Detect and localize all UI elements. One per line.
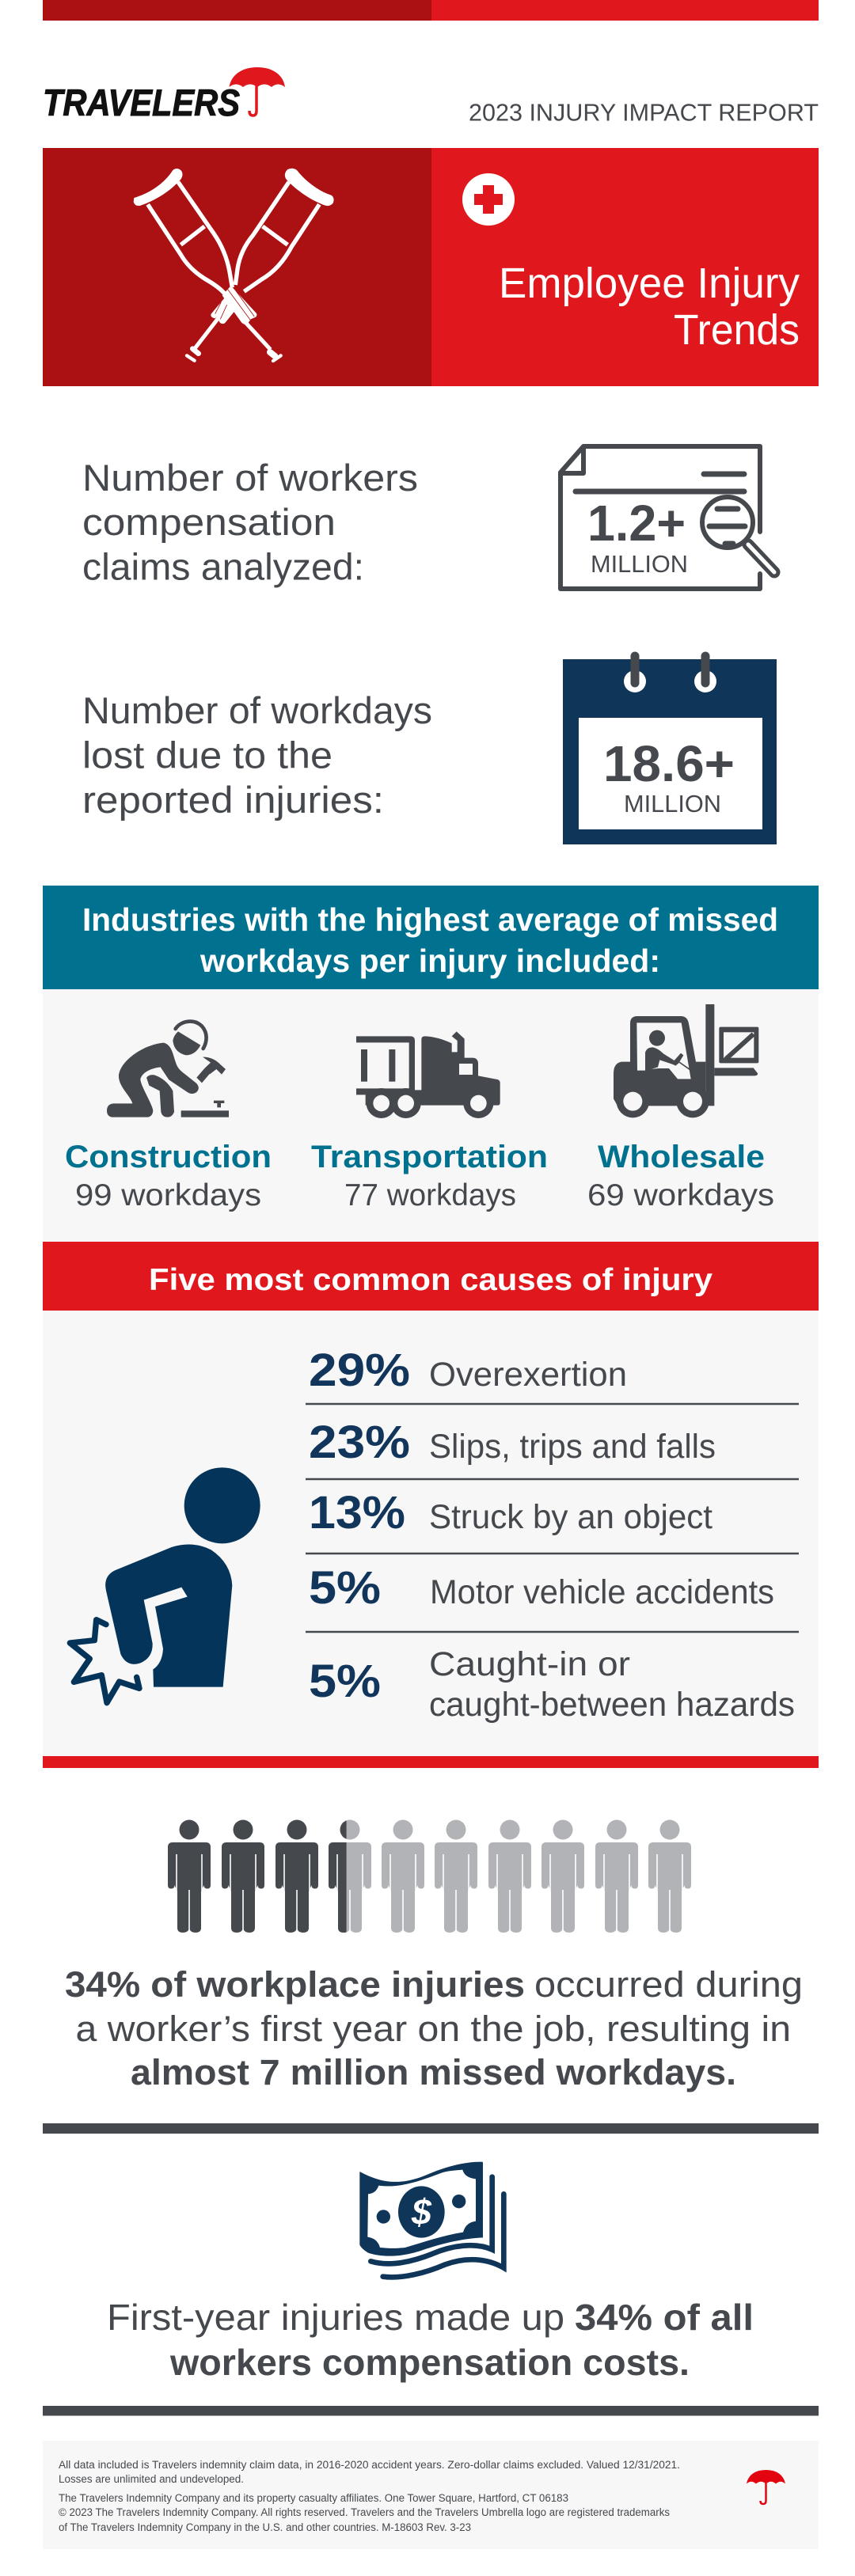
heading: Trends <box>674 306 800 354</box>
text: wholesale <box>587 1140 774 1212</box>
icon: forklift <box>614 1004 758 1117</box>
heading <box>499 260 800 354</box>
text: transportation <box>311 1140 548 1212</box>
text: wholesale: 69 workdays <box>587 1178 774 1212</box>
text: claims analyzed: Number of workers <box>82 457 418 499</box>
icon: money: $ <box>411 2192 432 2233</box>
panel: footer <box>43 2441 819 2549</box>
text: transportation: Transportation <box>311 1140 548 1174</box>
text: first-year costs <box>107 2297 754 2383</box>
icon: medical cross <box>462 173 515 226</box>
text: legal notes: Losses are unlimited and undeveloped. <box>59 2473 244 2485</box>
icon: calendar: MILLION <box>624 790 721 818</box>
icon: truck <box>356 1031 500 1118</box>
text: workdays lost: reported injuries: <box>82 779 384 821</box>
logo: Travelers: TRAVELERS <box>43 82 240 123</box>
row: struck: 13% <box>309 1487 405 1538</box>
icon: calendar <box>563 656 777 844</box>
heading: Industries with the highest average of missed <box>82 901 778 938</box>
logo: Travelers <box>43 67 285 123</box>
icon: claim document with magnifier: 1.2+ <box>587 495 686 552</box>
row: struck <box>309 1487 712 1538</box>
icon: row of ten people <box>168 1820 691 1933</box>
text: first-year costs: First-year injuries made up <box>107 2297 564 2338</box>
report title: 2023 INJURY IMPACT REPORT <box>469 98 819 127</box>
text: workdays lost <box>82 689 432 821</box>
row: motor vehicle <box>309 1562 774 1614</box>
text: workdays lost: Number of workdays <box>82 689 432 731</box>
heading <box>82 901 778 979</box>
text: first-year costs: workers compensation costs. <box>169 2342 690 2383</box>
text: legal notes <box>59 2459 680 2533</box>
text: first-year workplace injuries: almost 7 million missed workdays. <box>131 2052 736 2092</box>
heading: Five most common causes of injury <box>149 1263 712 1297</box>
text: legal notes: The Travelers Indemnity Company and its property casualty affiliates. One Tower Square, Hartford, CT 06183 <box>59 2492 568 2504</box>
row: caught: caught-between hazards <box>429 1686 795 1724</box>
text: legal notes: All data included is Travelers indemnity claim data, in 2016-2020 accident years. Zero-dollar claims excluded. Valued 12/31/2021. <box>59 2459 680 2471</box>
icon: umbrella <box>747 2470 785 2504</box>
heading: workdays per injury included: <box>200 943 660 979</box>
row: struck: Struck by an object <box>429 1498 712 1536</box>
heading: Employee Injury <box>499 260 800 307</box>
icon: claim document with magnifier: MILLION <box>591 550 688 578</box>
text: claims analyzed: compensation <box>82 501 336 543</box>
row: motor vehicle: 5% <box>309 1562 381 1614</box>
panel: causes of injury <box>43 1242 819 1768</box>
row: caught: Caught-in or <box>429 1645 630 1683</box>
icon: crutches <box>134 169 334 361</box>
row: caught <box>309 1645 795 1724</box>
row: slips: 23% <box>309 1417 410 1468</box>
icon: construction worker <box>107 1022 229 1117</box>
icon: claim document with magnifier <box>560 446 774 589</box>
icon: calendar: 18.6+ <box>603 735 735 792</box>
text: construction: 99 workdays <box>75 1178 261 1212</box>
row: slips: Slips, trips and falls <box>429 1428 716 1466</box>
text: claims analyzed: claims analyzed: <box>82 546 364 587</box>
text: legal notes: of The Travelers Indemnity Company in the U.S. and other countries. M-18603 Rev. 3-23 <box>59 2521 471 2533</box>
text: wholesale: Wholesale <box>598 1140 765 1174</box>
text: workdays lost: lost due to the <box>82 734 332 776</box>
top colour band <box>43 0 819 21</box>
icon: person with back pain <box>70 1467 260 1703</box>
text: construction: Construction <box>65 1140 272 1174</box>
row: overexertion: Overexertion <box>429 1356 627 1394</box>
row: overexertion: 29% <box>309 1345 410 1396</box>
text: first-year workplace injuries: occurred during <box>534 1964 803 2005</box>
row: slips <box>309 1417 716 1468</box>
text: first-year workplace injuries: 34% of workplace injuries <box>65 1964 525 2005</box>
row: caught: 5% <box>309 1656 381 1707</box>
text: first-year workplace injuries <box>65 1964 803 2092</box>
icon: money <box>359 2162 504 2277</box>
panel: industries <box>43 886 819 1242</box>
text: claims analyzed <box>82 457 418 587</box>
text: transportation: 77 workdays <box>344 1178 516 1212</box>
text: first-year costs: 34% of all <box>575 2297 754 2338</box>
text: construction <box>65 1140 272 1212</box>
text: first-year workplace injuries: a worker’s first year on the job, resulting in <box>76 2009 791 2049</box>
row: overexertion <box>309 1345 627 1396</box>
row: motor vehicle: Motor vehicle accidents <box>430 1573 774 1611</box>
text: legal notes: © 2023 The Travelers Indemnity Company. All rights reserved. Travelers and the Travelers Umbrella logo are registered trademarks <box>59 2506 670 2518</box>
panel: hero <box>43 148 819 386</box>
